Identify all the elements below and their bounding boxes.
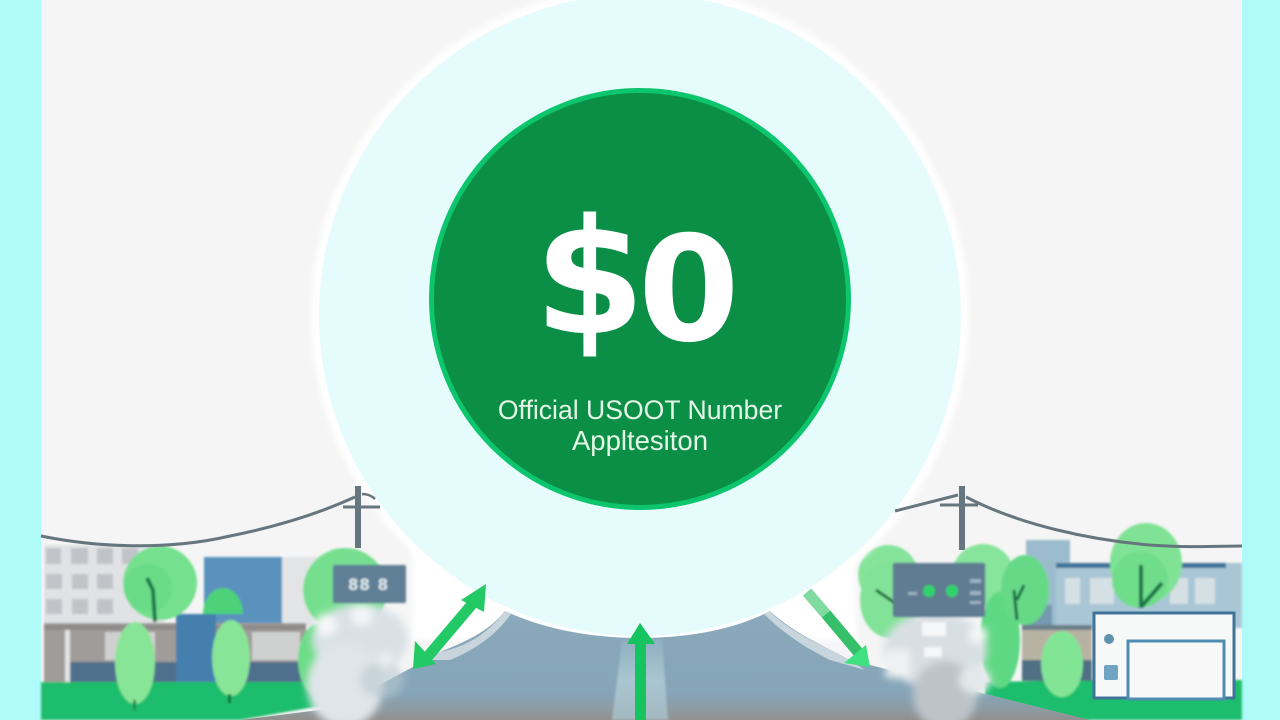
right kiosk robot bbox=[883, 563, 991, 720]
left blue building bbox=[204, 557, 282, 627]
amount bbox=[534, 184, 740, 375]
left street scene bbox=[41, 545, 387, 720]
badge caption: Official USOOT Number bbox=[498, 395, 782, 425]
green dollar badge bbox=[432, 90, 848, 508]
right green arrow bbox=[807, 592, 870, 667]
white halo around the large circle bbox=[311, 0, 969, 644]
small left tree bbox=[203, 588, 243, 614]
right kiosk panels bbox=[922, 622, 946, 657]
road bbox=[240, 611, 1090, 720]
white haze wedges beside the circle bbox=[412, 530, 858, 640]
utility pole left bbox=[41, 486, 380, 548]
application window panel bbox=[1094, 613, 1234, 699]
left bushes bbox=[115, 620, 250, 710]
inner window bbox=[1128, 641, 1224, 699]
road light edge left bbox=[425, 611, 511, 660]
right kiosk screen bbox=[893, 563, 985, 617]
utility pole right bbox=[895, 486, 1242, 550]
right fence bbox=[1022, 625, 1092, 681]
left kiosk screen: 88 8 bbox=[348, 575, 390, 594]
left kiosk screen bbox=[333, 565, 406, 603]
window icons bbox=[1104, 634, 1118, 680]
right bush bbox=[1041, 631, 1083, 697]
left grey office building bbox=[44, 545, 164, 625]
large right tree bbox=[1110, 523, 1182, 608]
large left tree bbox=[123, 546, 197, 622]
left pale building bbox=[282, 557, 332, 627]
dollar sign: $ bbox=[534, 184, 645, 371]
right smoke figure bbox=[883, 612, 991, 720]
right ground bbox=[985, 680, 1242, 720]
left tree behind right kiosk bbox=[858, 545, 920, 638]
tree behind left kiosk bbox=[298, 548, 387, 696]
right blue-grey buildings bbox=[1022, 540, 1242, 630]
left ground bbox=[41, 682, 320, 720]
middle tree behind right kiosk bbox=[952, 544, 1020, 688]
zero: 0 bbox=[638, 205, 740, 375]
left kiosk robot bbox=[307, 565, 408, 720]
center lane bbox=[612, 640, 668, 720]
right street scene bbox=[858, 523, 1242, 720]
large pale circle bbox=[319, 0, 961, 636]
road light edge right bbox=[764, 611, 865, 670]
left fence bbox=[44, 623, 310, 682]
center green up arrow bbox=[627, 623, 655, 720]
double-headed green arrow bbox=[413, 584, 486, 669]
badge caption: Appltesiton bbox=[572, 425, 708, 456]
left smoke figure bbox=[307, 604, 408, 720]
left blue doorway bbox=[176, 614, 216, 682]
tree beside right kiosk bbox=[1001, 555, 1049, 625]
